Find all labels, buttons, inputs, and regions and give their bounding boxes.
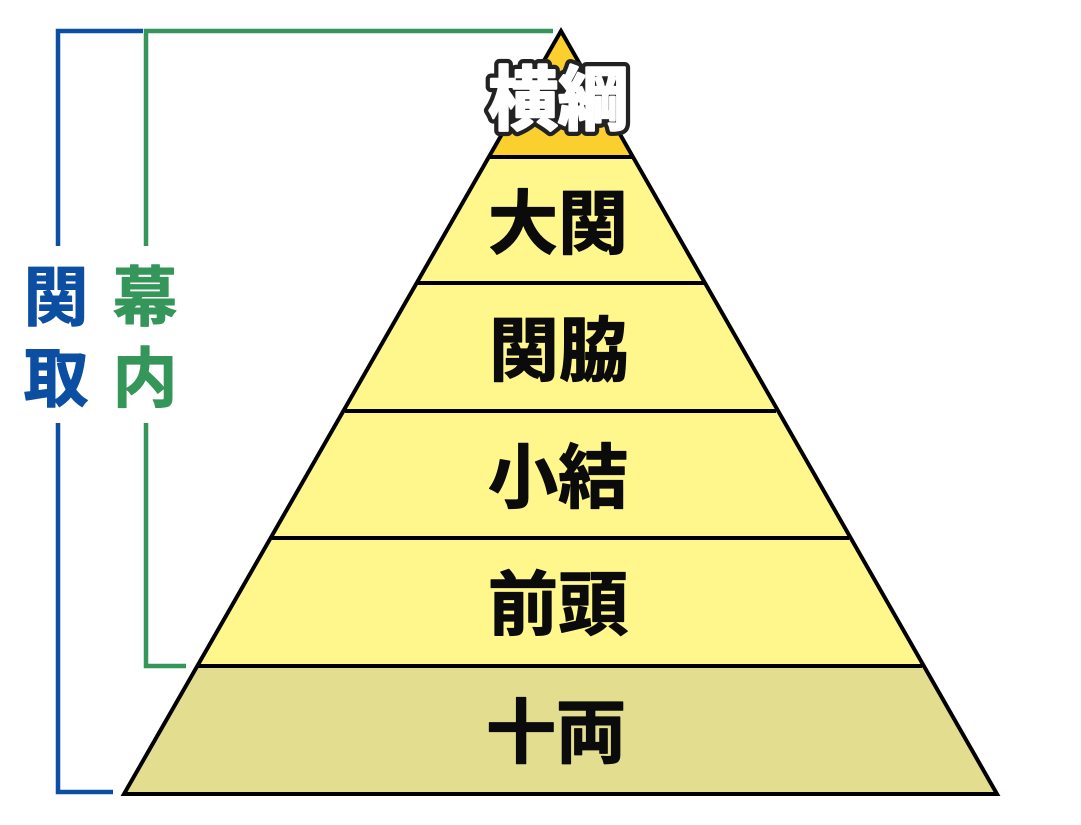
tier: ozeki background (417, 157, 704, 283)
label: sekiwake: 関脇 (489, 312, 629, 390)
pyramid outline (124, 31, 997, 794)
label: ozeki: 大関 (488, 185, 628, 263)
tier dividers (198, 157, 922, 666)
pyramid (124, 31, 997, 794)
character: uchi: 内 (112, 342, 178, 415)
tier: sekiwake background (345, 283, 776, 411)
label: maegashira: 前頭 (488, 566, 628, 644)
character: maku: 幕 (112, 261, 178, 334)
tier: juryo background (124, 666, 997, 794)
bracket: sekitori (58, 31, 143, 792)
label: yokozuna: 横綱 (488, 61, 628, 139)
label: yokozuna: 横綱 (488, 61, 628, 139)
label: komusubi: 小結 (488, 439, 628, 517)
side label: sekitori (23, 261, 89, 415)
tier: maegashira background (198, 538, 922, 666)
tier: komusubi background (272, 411, 849, 538)
label: juryo: 十両 (486, 694, 626, 772)
character: tori: 取 (23, 342, 89, 415)
side label: makuuchi (112, 261, 178, 415)
bracket: makuuchi (146, 31, 553, 666)
tier: yokozuna background (489, 31, 633, 157)
character: seki: 関 (23, 261, 89, 334)
